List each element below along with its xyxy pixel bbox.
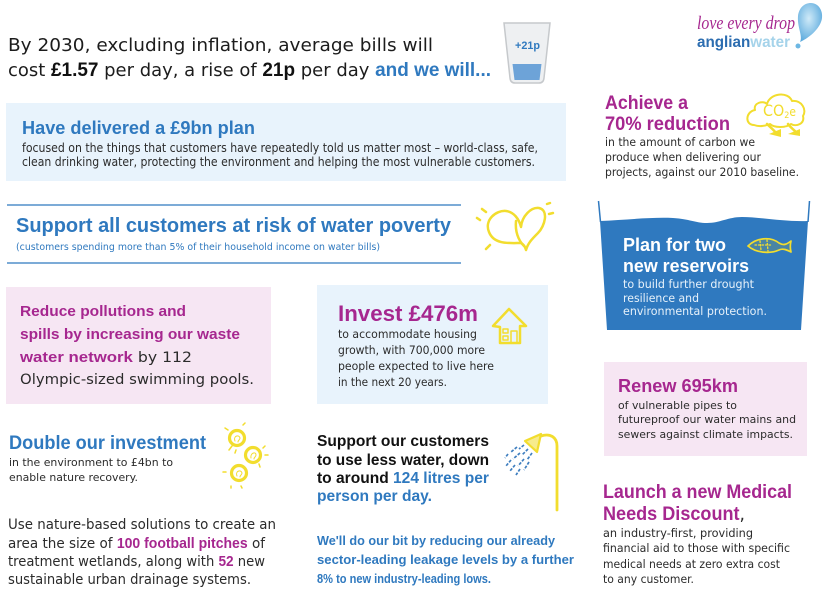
icon: shower [505,434,557,510]
panel: invest 476m: Invest £476m [338,301,478,326]
panel: plan for two new reservoirs: new reservoirs [623,256,749,276]
panel: have delivered a 9bn plan: Have delivered a £9bn plan [22,118,255,138]
panel: plan for two new reservoirs: to build further drought [623,277,754,291]
panel: plan for two new reservoirs: resilience and [623,291,699,305]
icon: glass of water [504,23,550,83]
panel: invest 476m: people expected to live here [338,359,494,373]
icon: fish [748,239,791,252]
icon: heart [477,203,553,250]
panel: invest 476m [317,285,548,404]
icon: CO2e cloud: CO [763,101,787,120]
panel: medical needs discount: Needs Discount, [603,504,745,525]
panel: medical needs discount: an industry-first, providing [603,526,753,540]
panel: water poverty: (customers spending more than 5% of their household income on water bills) [16,242,380,253]
text: support customers less water: person per day. [317,488,432,505]
text: nature-based solutions: area the size of 100 football pitches of [8,536,266,552]
icon: CO2e cloud: 2 [784,111,789,121]
text: support customers less water [317,433,489,505]
icon: house [493,309,526,343]
panel: reduce pollutions: water network by 112 [19,349,192,366]
text: support customers less water: to use less water, down [317,452,489,469]
panel: renew 695km: of vulnerable pipes to [618,399,737,412]
panel: achieve 70% reduction: 70% reduction [605,114,730,135]
logo: love every drop anglianwater: anglianwater [697,34,790,51]
logo: love every drop anglianwater: love every drop [697,13,795,34]
text: nature-based solutions [8,517,276,588]
panel: reduce pollutions: spills by increasing our waste [20,326,240,343]
title: By 2030, excluding inflation, average bills will [8,35,433,56]
panel: achieve 70% reduction: projects, against our 2010 baseline. [605,165,799,179]
title: cost £1.57 per day, a rise of 21p per day and we will... [8,60,491,81]
panel: achieve 70% reduction [605,93,799,179]
panel: have delivered a 9bn plan [6,103,566,181]
panel: invest 476m: growth, with 700,000 more [338,343,485,357]
panel: have delivered a 9bn plan: focused on the things that customers have repeatedly told us matter most – world-class, safe, [22,141,538,155]
panel: achieve 70% reduction: produce when delivering our [605,150,761,164]
panel: double our investment: in the environment to £4bn to [9,456,173,469]
panel: medical needs discount: to any customer. [603,572,694,586]
text: leakage [317,533,574,586]
panel: renew 695km: Renew 695km [618,376,738,396]
panel: plan for two new reservoirs [598,201,810,330]
panel: invest 476m: to accommodate housing [338,327,477,341]
text: nature-based solutions: sustainable urban drainage systems. [8,572,251,588]
panel: double our investment: enable nature recovery. [9,471,138,484]
panel: double our investment [9,433,207,484]
panel: reduce pollutions: Olympic-sized swimming pools. [20,372,254,388]
panel: renew 695km: sewers against climate impacts. [618,428,793,441]
panel: medical needs discount: financial aid to those with specific [603,541,790,555]
panel: achieve 70% reduction: Achieve a [605,93,688,114]
panel: renew 695km [604,362,807,456]
panel: have delivered a 9bn plan: clean drinking water, protecting the environment and helping the most vulnerable customers. [22,155,535,169]
icon: CO2e cloud: e [789,105,796,119]
text: leakage: 8% to new industry-leading lows. [317,571,491,586]
panel: reduce pollutions [6,287,271,404]
logo: love every drop anglianwater [697,3,822,51]
panel: double our investment: Double our investment [9,433,207,454]
panel: reduce pollutions: Reduce pollutions and [20,303,186,320]
panel: water poverty: Support all customers at risk of water poverty [16,215,452,237]
icon: three coins [223,423,268,488]
panel: plan for two new reservoirs: environmental protection. [623,304,767,318]
icon: CO2e cloud [747,95,804,137]
icon: glass of water: +21p [515,40,540,52]
panel: renew 695km: futureproof our water mains and [618,413,796,426]
text: nature-based solutions: Use nature-based solutions to create an [8,517,276,533]
title [8,35,491,81]
panel: achieve 70% reduction: in the amount of carbon we [605,135,755,149]
panel: plan for two new reservoirs: Plan for two [623,235,726,255]
text: support customers less water: to around 124 litres per [317,470,489,487]
text: support customers less water: Support our customers [317,433,489,450]
panel: medical needs discount: Launch a new Medical [603,482,792,503]
panel: invest 476m: in the next 20 years. [338,375,447,389]
panel: water poverty [7,205,461,263]
panel: medical needs discount: medical needs at zero extra cost [603,557,780,571]
text: leakage: We'll do our bit by reducing our already [317,533,556,548]
text: nature-based solutions: treatment wetlands, along with 52 new [8,554,265,570]
text: leakage: sector-leading leakage levels by a further [317,552,574,567]
panel: medical needs discount [603,482,792,586]
